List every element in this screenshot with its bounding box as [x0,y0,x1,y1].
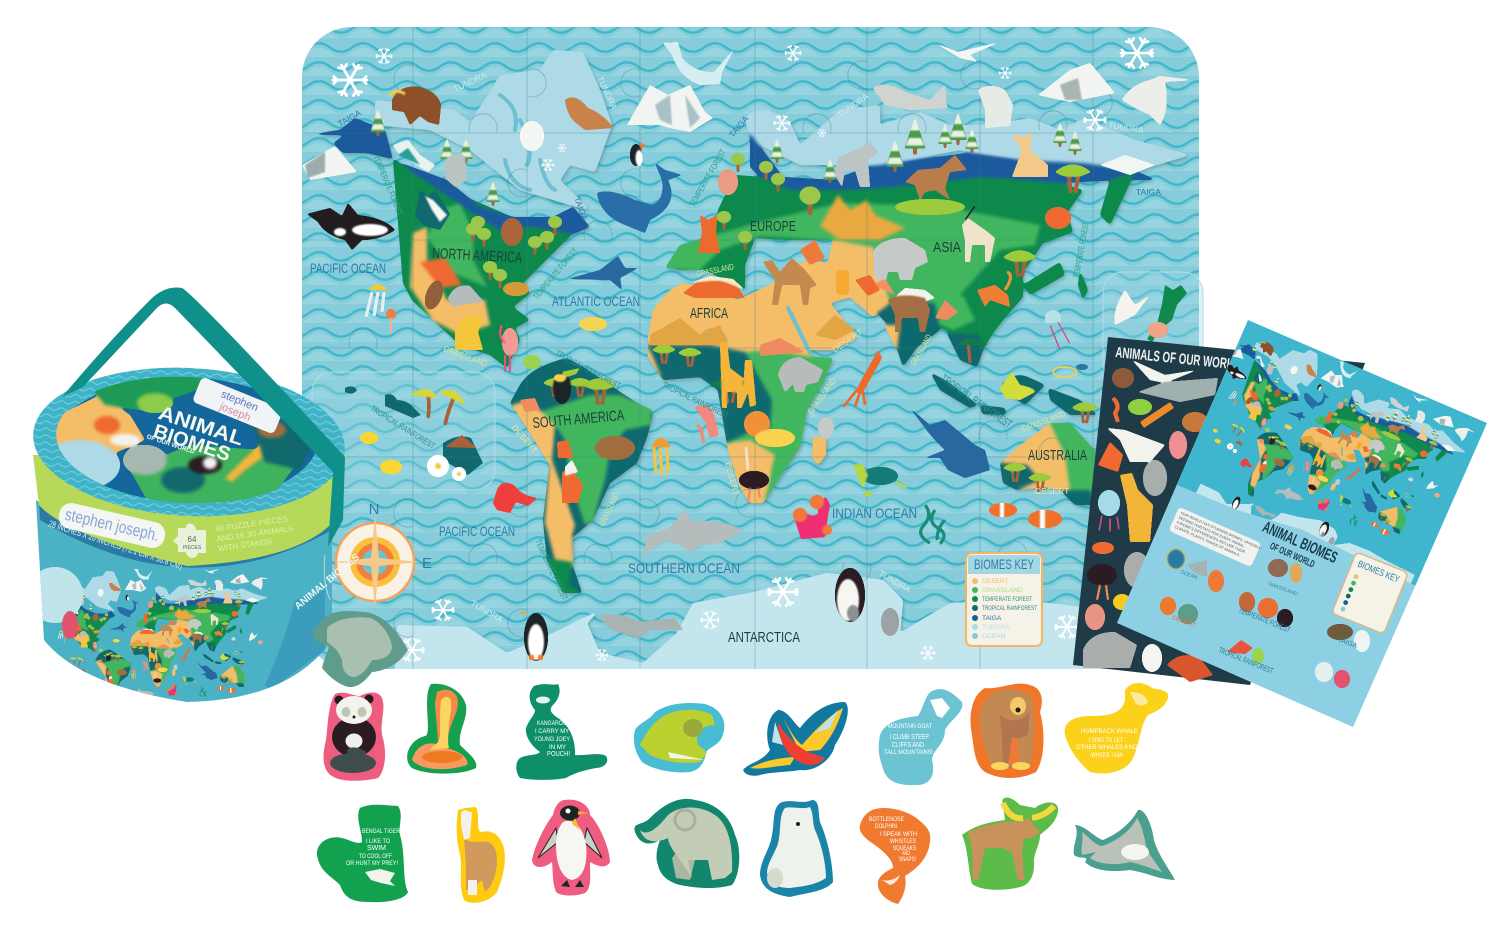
poster tokens [1160,549,1370,688]
animal: musk ox [389,87,441,125]
animal: sea turtle [853,464,910,497]
poster intro text box: CLIMATE, PLANTS, RANGE OF ANIMALS. [1174,525,1241,558]
animal: blue whale [597,163,682,233]
animal: toucan [553,368,580,404]
animal: island frog [1000,372,1035,400]
animal: orange jellyfish [651,438,671,476]
map labels: TROPICAL RAINFOREST [369,403,437,451]
animal: manta ray [568,256,638,290]
animal: jelly [1045,310,1070,350]
box side map [40,567,325,697]
token: bottlenose dolphin: SQUEAKS [893,846,916,852]
animal: tropical fish [360,432,402,474]
token: panda [324,692,385,781]
legend rows: DESERT [982,578,1009,585]
animal: armadillo [448,286,484,307]
lid title: ANIMAL [156,402,246,450]
map labels: INDIAN OCEAN [832,505,917,521]
map labels: TROPICAL RAINFOREST [938,373,1014,431]
poster intro text box [1169,507,1264,568]
poster title [1260,519,1340,571]
legend rows: TROPICAL RAINFOREST [982,605,1037,612]
animal: puffin [630,142,646,166]
map labels: GRASSLAND [597,491,621,528]
animal: camel [763,258,817,305]
animal: fox [698,215,720,253]
animal: octopus [493,483,537,513]
token: humpback whale: HUMPBACK WHALE [1081,728,1139,735]
map labels: TUNDRA [469,598,505,625]
lid badge: stephen [219,388,260,414]
token: bottlenose dolphin: SNAPS! [899,857,916,863]
token: bottlenose dolphin: BOTTLENOSE [869,816,905,823]
puzzle piece badge: PIECES [183,545,202,551]
poster: animal biomes map [1117,318,1487,727]
map labels: TAIGA [572,195,590,222]
animal: yak [888,295,930,332]
token: kangaroo: KANGAROO [537,720,567,727]
inset: Hawaii panel [312,372,495,490]
token: polar bear [760,800,833,897]
poster biome labels [1171,569,1358,676]
token: kangaroo: IN MY [549,744,567,751]
map labels: TROPICAL RAINFOREST [661,380,730,420]
token: humpback whale [1065,683,1168,774]
lid title: BIOMES [150,420,233,466]
map labels: ANTARCTICA [728,629,800,646]
token: bengal tiger: SWIM [367,843,386,852]
side badge: stephen joseph. [63,505,161,545]
animal: blossom [1148,322,1168,338]
box blue band [39,500,332,568]
map labels: SOUTH AMERICA [532,407,625,432]
legend rows: GRASSLAND [982,587,1023,594]
poster biome labels: DESERT [1171,615,1196,629]
lid rim [29,360,349,524]
map labels: EUROPE [750,218,796,235]
map labels: TUNDRA [452,70,488,94]
animal: coral polyps [793,495,832,535]
lid badge: joseph [217,400,252,424]
map labels: GRASSLAND [805,376,838,416]
animal: frog [523,355,541,369]
box lid side [33,455,346,566]
token: bengal tiger: OR HUNT MY PREY! [346,861,398,867]
poster intro text box: OUR WORLD HAS STUNNING BIOMES, UNIQUELY [1180,511,1262,551]
token: mountain goat: I CLIMB STEEP [890,734,929,741]
poster intro text box: A BIOME'S DIFFERENCES INCLUDE THEIR [1176,520,1246,554]
token: bear [971,684,1043,778]
animal: snow seal [445,154,467,187]
animal: monkey [977,272,1011,307]
animal: horse [905,155,967,200]
side copy: WITH STANDS [217,537,273,553]
poster: animals of our world [1073,337,1365,685]
poster map [1117,318,1487,727]
map labels [310,70,1161,646]
token: mountain goat: CLIFFS AND [892,742,924,749]
token: parrot [743,702,848,776]
inset: Japan panel [1103,272,1203,382]
map labels: TUNDRA [1108,120,1145,135]
compass: N [369,501,379,518]
biomes key [966,553,1042,646]
animal: beaver [501,218,523,246]
animals and scenery [302,42,1193,661]
animal: seahorses [697,407,717,443]
map labels: PACIFIC OCEAN [439,523,515,539]
compass: E [422,555,432,572]
token: mountain goat: MOUNTAIN GOAT [888,723,932,730]
lid badge [192,376,284,434]
token: bengal tiger: I LIKE TO [366,838,390,845]
animal: bird [935,42,1000,62]
map labels: GRASSLAND [695,261,735,279]
animal: palm trees [410,389,465,425]
animal: wolf [835,142,878,187]
animal: lemur [818,417,834,439]
animal: walrus [565,97,613,130]
token: shark [1074,810,1175,880]
animal: jaguar [455,315,483,350]
token: kangaroo: YOUNG JOEY [534,736,571,743]
token: humpback whale: OTHER WHALES KNOW [1076,744,1144,751]
animal: penguin chick [881,608,899,636]
compass [335,501,432,608]
map labels: TUNDRA [835,91,870,120]
animal: clownfish [989,503,1062,528]
poster title: ANIMALS OF OUR WORLD [1115,344,1241,374]
side copy [215,514,295,553]
side copy: AND 16 3D ANIMALS [216,524,294,543]
legend rows [972,578,1037,640]
lid title: OF OUR WORLD [146,434,196,456]
animal: seaweed [921,505,945,544]
animal: wetland [895,199,965,215]
map labels: TEMPERATE FOREST [1071,221,1091,278]
token: mountain goat [879,689,962,785]
token: bottlenose dolphin: WHISTLES [890,839,916,845]
animal: pig [718,169,738,195]
animal: rhino [873,238,928,280]
poster intro text box: DEFINED HABITATS FOR EVERY ANIMAL. [1178,516,1246,549]
legend rows: TAIGA [982,615,1002,622]
animal: koi [1114,290,1150,325]
poster title: OF OUR WORLD [1268,541,1316,571]
token: cobra [407,684,476,774]
poster biome labels: TEMPERATE FOREST [1237,606,1292,634]
map labels: TROPICAL RAINFOREST [554,348,622,391]
poster biome labels: OCEAN [1179,569,1198,581]
tokens row 1 [324,683,1168,785]
animal: whale shark [910,408,990,478]
animal: narwhal [663,42,735,85]
animal: flamingo [500,325,518,372]
animal: tiger [836,270,849,295]
poster biome labels: TAIGA [1336,636,1358,650]
animal: arctic hare [520,121,544,151]
map labels: AFRICA [690,305,728,322]
token: moose [962,798,1058,890]
map labels: AUSTRALIA [1028,447,1087,464]
poster title: ANIMAL BIOMES [1260,519,1340,567]
animal: tortoise [503,282,529,296]
side title: ANIMAL BIOMES [293,552,362,612]
trees [370,109,1098,492]
map labels: PACIFIC OCEAN [310,260,386,276]
animal: hawk [421,278,447,312]
animal: ostrich [739,447,769,503]
animal: jellyfish [366,284,396,334]
map labels: TEMPERATE FOREST [687,148,728,208]
animal: sloth [595,436,635,460]
lid artwork [56,376,315,504]
map labels: TUNDRA [595,75,619,111]
token: bengal tiger: TO COOL OFF [359,854,392,860]
map labels: ATLANTIC OCEAN [552,293,640,309]
map labels: DESERT [723,461,742,497]
animal: lion [744,411,795,447]
puzzle board [302,27,1203,672]
legend rows: TEMPERATE FOREST [982,596,1032,603]
map labels: TAIGA [336,107,363,129]
animal: orca [307,203,395,250]
legend rows: OCEAN [982,633,1006,640]
snowflakes [333,38,1153,661]
map labels: NORTH AMERICA [432,245,523,267]
map labels: GRASSLAND [442,343,489,369]
puzzle piece badge [173,524,206,558]
token: kangaroo: I CARRY MY [535,728,570,735]
token: penguin [532,800,610,896]
animal: harp seal [873,85,947,110]
token: humpback whale: I SING TO LET [1089,737,1123,744]
map labels: TAIGA [727,114,751,139]
token: bottlenose dolphin: AND [902,851,910,857]
token: llama [457,807,505,903]
lid title [146,402,246,466]
biomes key: BIOMES KEY [974,556,1034,572]
poster biome labels: TROPICAL RAINFOREST [1217,646,1274,676]
animal: crab [579,317,607,331]
poster biome labels: GRASSLAND [1267,581,1299,598]
map labels: TEMPERATE FOREST [533,538,570,602]
animal: giraffe [720,342,756,408]
band text: 28 INCHES X 20 INCHES (71.1 CM X 50.8 CM) [47,518,184,571]
token: bengal tiger [317,805,408,902]
animal: penguin [519,611,548,661]
map labels: ASIA [933,239,961,256]
map labels: TAIGA [1136,187,1161,197]
map labels: SOUTHERN OCEAN [628,560,740,576]
poster biomes key: BIOMES KEY [1356,559,1401,586]
animal: volcano and flowers [427,435,477,481]
map labels: GRASSLAND [1020,409,1067,434]
animal: red panda [1045,207,1071,229]
animal: sea lion [598,614,683,638]
map labels: DESERT [1035,486,1069,496]
map labels: TUNDRA [877,568,913,595]
side copy: 48 PUZZLE PIECES [215,514,288,534]
token: mountain goat: TALL MOUNTAINS! [884,749,933,756]
carry strap [62,288,345,547]
animal: beluga [1122,76,1193,125]
token: bottlenose dolphin: I SPEAK WITH [880,831,917,838]
world map landmasses [305,50,1199,672]
poster animals [1083,360,1218,682]
inland seas [500,95,810,353]
map labels: TEMPERATE FOREST [531,246,580,301]
animal: lynx [1012,132,1048,177]
animal: hippo [778,357,823,392]
animal: polar bear [978,86,1013,128]
animal: shark [630,510,742,555]
animal: sunfish [1053,364,1088,377]
token: bottlenose dolphin [860,808,930,904]
hanging elephant token [313,555,408,687]
box body [36,500,332,702]
animal: oryx [962,206,995,262]
map labels: DESERT [510,423,540,455]
puzzle cut lines [302,27,1199,669]
animal: coral [795,497,830,539]
legend rows: TUNDRA [982,624,1010,631]
map labels: TEMPERATE FOREST [371,154,405,217]
map labels: DESERT [830,327,864,355]
token: kangaroo: POUCH! [547,751,570,758]
token: bengal tiger: BENGAL TIGER [362,828,400,835]
token: humpback whale: WHERE I AM! [1091,752,1123,759]
storage box [27,288,408,729]
animal: squid [843,350,882,407]
map labels: GRASSLAND [908,333,934,367]
token: kangaroo [516,684,607,780]
token: crocodile [634,703,724,772]
token: bottlenose dolphin: DOLPHIN [875,823,897,830]
animal: emperor penguin [835,568,865,622]
token: elephant [634,799,739,888]
panel: ocean with waves [302,27,1199,669]
mountains and icebergs [302,63,1155,503]
poster biomes key [1332,552,1408,634]
puzzle piece badge: 64 [188,535,197,544]
tokens row 2 [317,798,1175,904]
